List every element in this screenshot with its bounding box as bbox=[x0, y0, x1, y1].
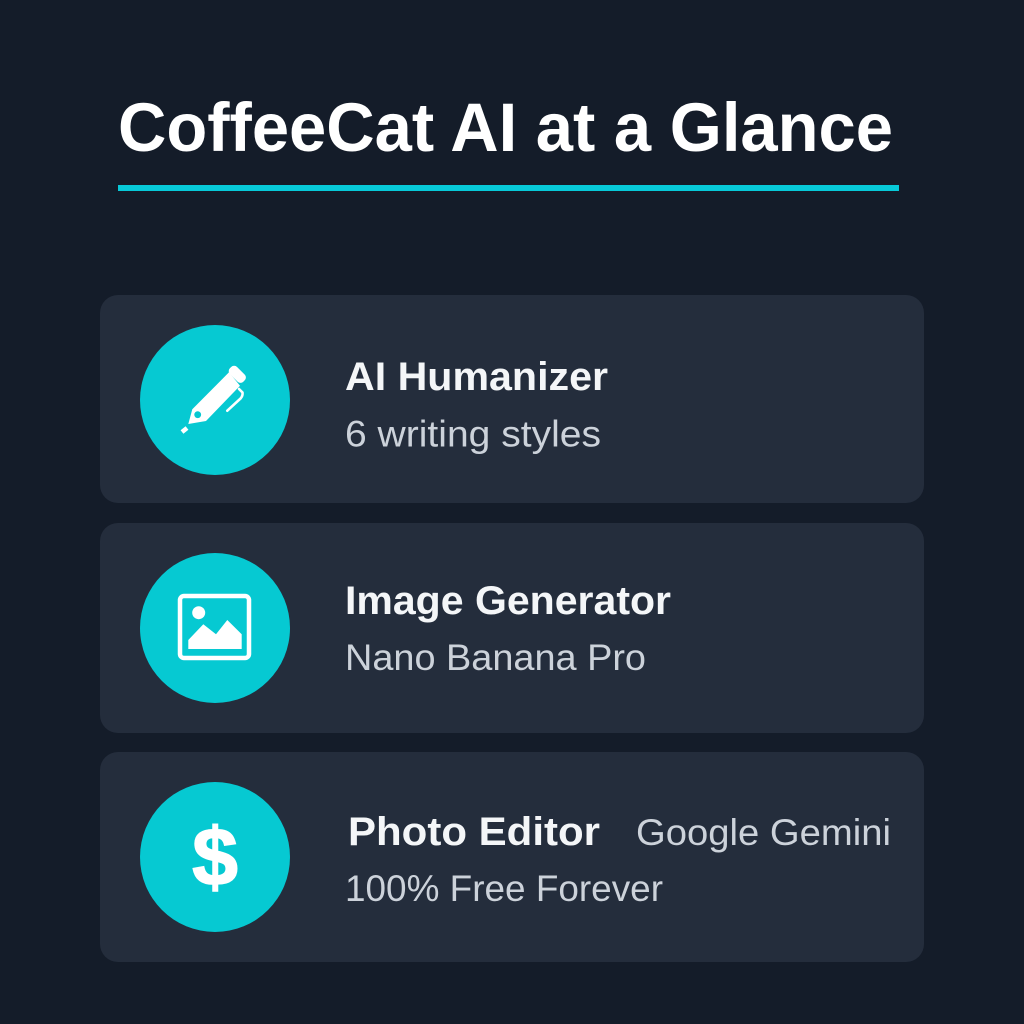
icon: image bbox=[140, 553, 290, 703]
heading: Photo Editor: Photo Editor bbox=[348, 810, 600, 854]
heading: AI Humanizer: AI Humanizer bbox=[345, 355, 608, 399]
card background bbox=[100, 295, 924, 503]
text: Google Gemini: Google Gemini bbox=[636, 811, 891, 853]
title underline bbox=[118, 185, 899, 191]
panel: Photo Editor bbox=[100, 752, 924, 962]
card background bbox=[100, 752, 924, 962]
icon: dollar sign bbox=[140, 782, 290, 932]
card background bbox=[100, 523, 924, 733]
text: 6 writing styles: 6 writing styles bbox=[345, 412, 601, 454]
panel: Image Generator bbox=[100, 523, 924, 733]
icon: dollar sign: $ bbox=[192, 812, 238, 903]
heading: Image Generator: Image Generator bbox=[345, 579, 671, 623]
panel: AI Humanizer bbox=[100, 295, 924, 503]
text: 100% Free Forever: 100% Free Forever bbox=[345, 867, 663, 909]
title: CoffeeCat AI at a Glance bbox=[118, 89, 893, 166]
text: Nano Banana Pro: Nano Banana Pro bbox=[345, 636, 646, 678]
icon: pen bbox=[140, 325, 290, 475]
